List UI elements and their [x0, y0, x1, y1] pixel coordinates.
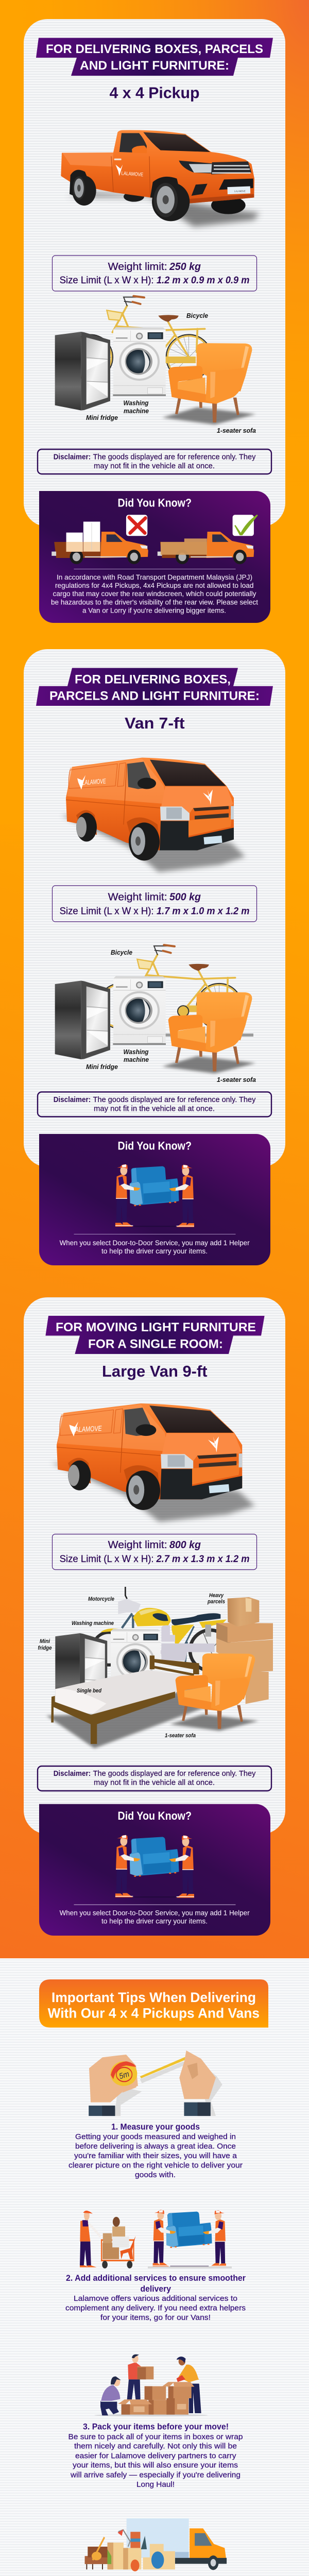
heading banner: PARCELS AND LIGHT FURNITURE: — [49, 689, 260, 703]
weight and size limits box — [53, 886, 256, 922]
disclaimer box — [38, 449, 271, 474]
did you know body text: cargo that may cover the rear windscreen, which could potentially — [53, 590, 256, 598]
panel: van 7-ft section — [24, 649, 285, 1265]
goods illustration: bicycle, fridge, washer, sofa — [55, 296, 256, 434]
icon: heavy parcels stack — [216, 1597, 273, 1704]
vehicle title: Large Van 9-ft — [102, 1362, 208, 1380]
card background — [24, 649, 285, 1167]
weight and size limits box — [53, 256, 256, 291]
goods labels: Motorcycle — [88, 1596, 114, 1602]
did you know body text: When you select Door-to-Door Service, you may add 1 Helper — [60, 1909, 250, 1917]
van illustration — [52, 1403, 255, 1522]
van illustration — [62, 757, 245, 872]
weight and size limits box: Size Limit (L x W x H): — [60, 275, 154, 286]
goods labels: parcels — [207, 1599, 225, 1605]
weight and size limits box: Size Limit (L x W x H): — [60, 1554, 154, 1565]
did you know body text: a Van or Lorry if you're delivering bigger items. — [82, 607, 226, 615]
weight and size limits box: Weight limit: — [108, 261, 167, 273]
disclaimer box: may not fit in the vehicle all at once. — [94, 1778, 215, 1787]
panel: 4 x 4 pickup section — [24, 19, 285, 623]
goods labels: 1-seater sofa — [217, 1076, 256, 1083]
panel: did you know (pickup) — [39, 491, 270, 623]
weight and size limits box — [53, 1534, 256, 1570]
disclaimer box: The goods displayed are for reference only. They — [93, 1095, 256, 1104]
disclaimer box: Disclaimer: — [54, 1769, 91, 1778]
goods illustration: bicycle, fridge, washer, sofa — [55, 945, 256, 1083]
did you know body text: regulations for 4x4 Pickups, 4x4 Pickups are not allowed to load — [55, 582, 254, 589]
pickup truck illustration — [61, 130, 259, 227]
heading banner: AND LIGHT FURNITURE: — [80, 59, 229, 73]
pickup truck illustration: LALAMOVE — [121, 171, 144, 178]
tips heading: With Our 4 x 4 Pickups And Vans — [48, 2005, 260, 2021]
did you know body text — [60, 1239, 250, 1255]
icon: motorcycle — [93, 1587, 231, 1671]
tip 3 text: easier for Lalamove delivery partners to carry — [75, 2451, 236, 2460]
tip 2 text: 2. Add additional services to ensure smoother — [66, 2273, 246, 2283]
icon: single bed — [46, 1655, 206, 1748]
card background — [24, 1297, 285, 1834]
disclaimer box: The goods displayed are for reference only. They — [93, 452, 256, 462]
disclaimer box: The goods displayed are for reference only. They — [93, 1769, 256, 1778]
tip 3 text — [68, 2422, 243, 2489]
icon: washing machine — [113, 976, 166, 1045]
icon: mini fridge — [55, 1633, 107, 1707]
heading banner: FOR DELIVERING BOXES, PARCELS — [46, 42, 263, 56]
icon: mini fridge — [55, 332, 110, 411]
did you know body text: to help the driver carry your items. — [101, 1247, 208, 1255]
tip 3 text: Be sure to pack all of your items in boxes or wrap — [68, 2432, 243, 2441]
disclaimer box: may not fit in the vehicle all at once. — [94, 462, 215, 470]
goods labels: fridge — [38, 1645, 52, 1651]
icon: helpers carrying a sofa — [153, 2210, 226, 2267]
tip 4: cheaper vehicle — [67, 2518, 245, 2576]
icon: 1-seater sofa — [162, 343, 256, 425]
goods labels: Heavy — [209, 1592, 224, 1599]
icon: mover pushing a loaded cart — [80, 2211, 135, 2268]
goods labels — [86, 949, 256, 1083]
icon: small truck and piled goods — [85, 2518, 227, 2571]
tip 3 text: your items, but this will also ensure your items — [73, 2461, 238, 2470]
weight and size limits box: 800 kg — [169, 1539, 201, 1551]
heading banner — [36, 38, 273, 76]
weight and size limits box: Weight limit: — [108, 891, 167, 903]
did you know body text: to help the driver carry your items. — [101, 1918, 208, 1925]
goods labels: machine — [124, 1056, 149, 1063]
tip 2 text: for your items, go for our Vans! — [100, 2313, 211, 2322]
tips heading — [39, 1979, 268, 2028]
panel: did you know (van 7-ft) — [39, 1134, 270, 1265]
goods labels: Bicycle — [186, 312, 208, 319]
goods labels: Washing — [124, 400, 149, 407]
panel: did you know (large van) — [39, 1804, 270, 1936]
tips heading: Important Tips When Delivering — [52, 1990, 256, 2005]
weight and size limits box: Size Limit (L x W x H): — [60, 906, 154, 917]
weight and size limits box: Weight limit: — [108, 1539, 167, 1551]
did you know body text: In accordance with Road Transport Department Malaysia (JPJ) — [57, 573, 252, 581]
goods labels: machine — [124, 408, 149, 415]
goods labels — [38, 1592, 225, 1739]
weight and size limits box: 2.7 m x 1.3 m x 1.2 m — [156, 1554, 250, 1565]
icon: incorrect loading truck — [52, 515, 148, 564]
icon: bicycle — [98, 945, 242, 1029]
icon: 1-seater sofa — [162, 992, 256, 1073]
icon: 1-seater sofa — [169, 1653, 259, 1731]
icon: two helpers carrying a sofa — [115, 1835, 194, 1898]
tip 3 text: Long Haul! — [136, 2480, 175, 2489]
icon: washing machine — [110, 1629, 161, 1694]
tip 3 text: 3. Pack your items before your move! — [83, 2422, 229, 2432]
tip 3: pack your items — [68, 2354, 243, 2489]
icon: mini fridge — [55, 980, 110, 1059]
page background — [0, 0, 309, 1958]
disclaimer box — [38, 1766, 271, 1791]
goods labels: Washing machine — [72, 1620, 114, 1626]
tip 3 text: will arrive safely — especially if you're delivering — [70, 2470, 241, 2479]
pickup truck illustration: LALAMOVE — [234, 190, 246, 193]
tip 1 text: clearer picture on the right vehicle to deliver your — [68, 2161, 243, 2170]
tip 2 text: complement any delivery. If you need extra helpers — [65, 2304, 246, 2312]
goods labels: Mini — [40, 1638, 50, 1645]
vehicle title: Van 7-ft — [125, 714, 185, 732]
heading banner — [45, 1316, 265, 1354]
did you know heading: Did You Know? — [117, 1809, 192, 1822]
weight and size limits box: 250 kg — [169, 261, 201, 273]
icon: two helpers carrying a sofa — [115, 1164, 194, 1227]
weight and size limits box: 1.2 m x 0.9 m x 0.9 m — [157, 275, 250, 286]
weight and size limits box: 500 kg — [169, 891, 201, 903]
tip 1 text — [68, 2122, 243, 2179]
heading banner: FOR DELIVERING BOXES, — [75, 673, 231, 687]
goods labels: Mini fridge — [86, 1063, 118, 1071]
tip 1 text: goods with. — [135, 2171, 176, 2179]
did you know heading: Did You Know? — [117, 497, 192, 509]
weight and size limits box: 1.7 m x 1.0 m x 1.2 m — [157, 906, 250, 917]
icon: washing machine — [113, 327, 166, 396]
tip 1 text: 1. Measure your goods — [111, 2122, 200, 2132]
disclaimer box — [38, 1092, 271, 1117]
van illustration: LALAMOVE — [82, 777, 106, 786]
heading banner: FOR A SINGLE ROOM: — [88, 1337, 223, 1351]
did you know body text — [51, 573, 258, 615]
tip 2 text: delivery — [140, 2284, 171, 2294]
van illustration: LALAMOVE — [72, 1424, 102, 1434]
vehicle title: 4 x 4 Pickup — [109, 83, 200, 102]
goods labels: Mini fridge — [86, 414, 118, 421]
tip 2 text — [65, 2273, 246, 2322]
did you know body text: When you select Door-to-Door Service, you may add 1 Helper — [60, 1239, 250, 1247]
icon: hands with tape measure: 5m — [118, 2069, 130, 2081]
tip 1 text: you're familiar with their sizes, you will have a — [74, 2151, 237, 2160]
disclaimer box: Disclaimer: — [54, 1095, 91, 1104]
icon: correct loading truck — [158, 515, 258, 564]
heading banner: FOR MOVING LIGHT FURNITURE — [56, 1320, 256, 1334]
did you know body text: be hazardous to the driver's visibility of the rear view. Please select — [51, 598, 258, 606]
goods labels: Washing — [124, 1048, 149, 1056]
did you know heading: Did You Know? — [117, 1140, 192, 1153]
icon: people packing boxes — [94, 2354, 208, 2416]
tip 1 text: Getting your goods measured and weighed in — [75, 2132, 236, 2141]
panel: important tips — [0, 1958, 309, 2576]
goods labels: Single bed — [77, 1688, 101, 1694]
heading banner — [36, 668, 273, 706]
icon: hands with tape measure — [89, 2050, 222, 2116]
goods labels: Bicycle — [111, 949, 132, 956]
goods labels: 1-seater sofa — [165, 1733, 196, 1739]
did you know body text — [60, 1909, 250, 1925]
panel: large van 9-ft section — [24, 1297, 285, 1936]
disclaimer box: Disclaimer: — [54, 452, 91, 462]
icon: bicycle — [67, 296, 212, 380]
tip 1 text: before delivering is always a great idea. Once — [75, 2142, 236, 2151]
goods illustration: motorcycle, parcels, fridge, washer, bed, sofa — [46, 1587, 273, 1748]
disclaimer box: may not fit in the vehicle all at once. — [94, 1105, 215, 1113]
goods labels — [86, 312, 256, 434]
tip 2: additional services — [65, 2210, 246, 2322]
goods labels: 1-seater sofa — [217, 427, 256, 434]
tip 1: measure your goods — [68, 2050, 243, 2179]
card background — [24, 19, 285, 527]
tip 2 text: Lalamove offers various additional services to — [74, 2294, 237, 2303]
tip 3 text: them nicely and carefully. Not only this will be — [74, 2442, 237, 2451]
